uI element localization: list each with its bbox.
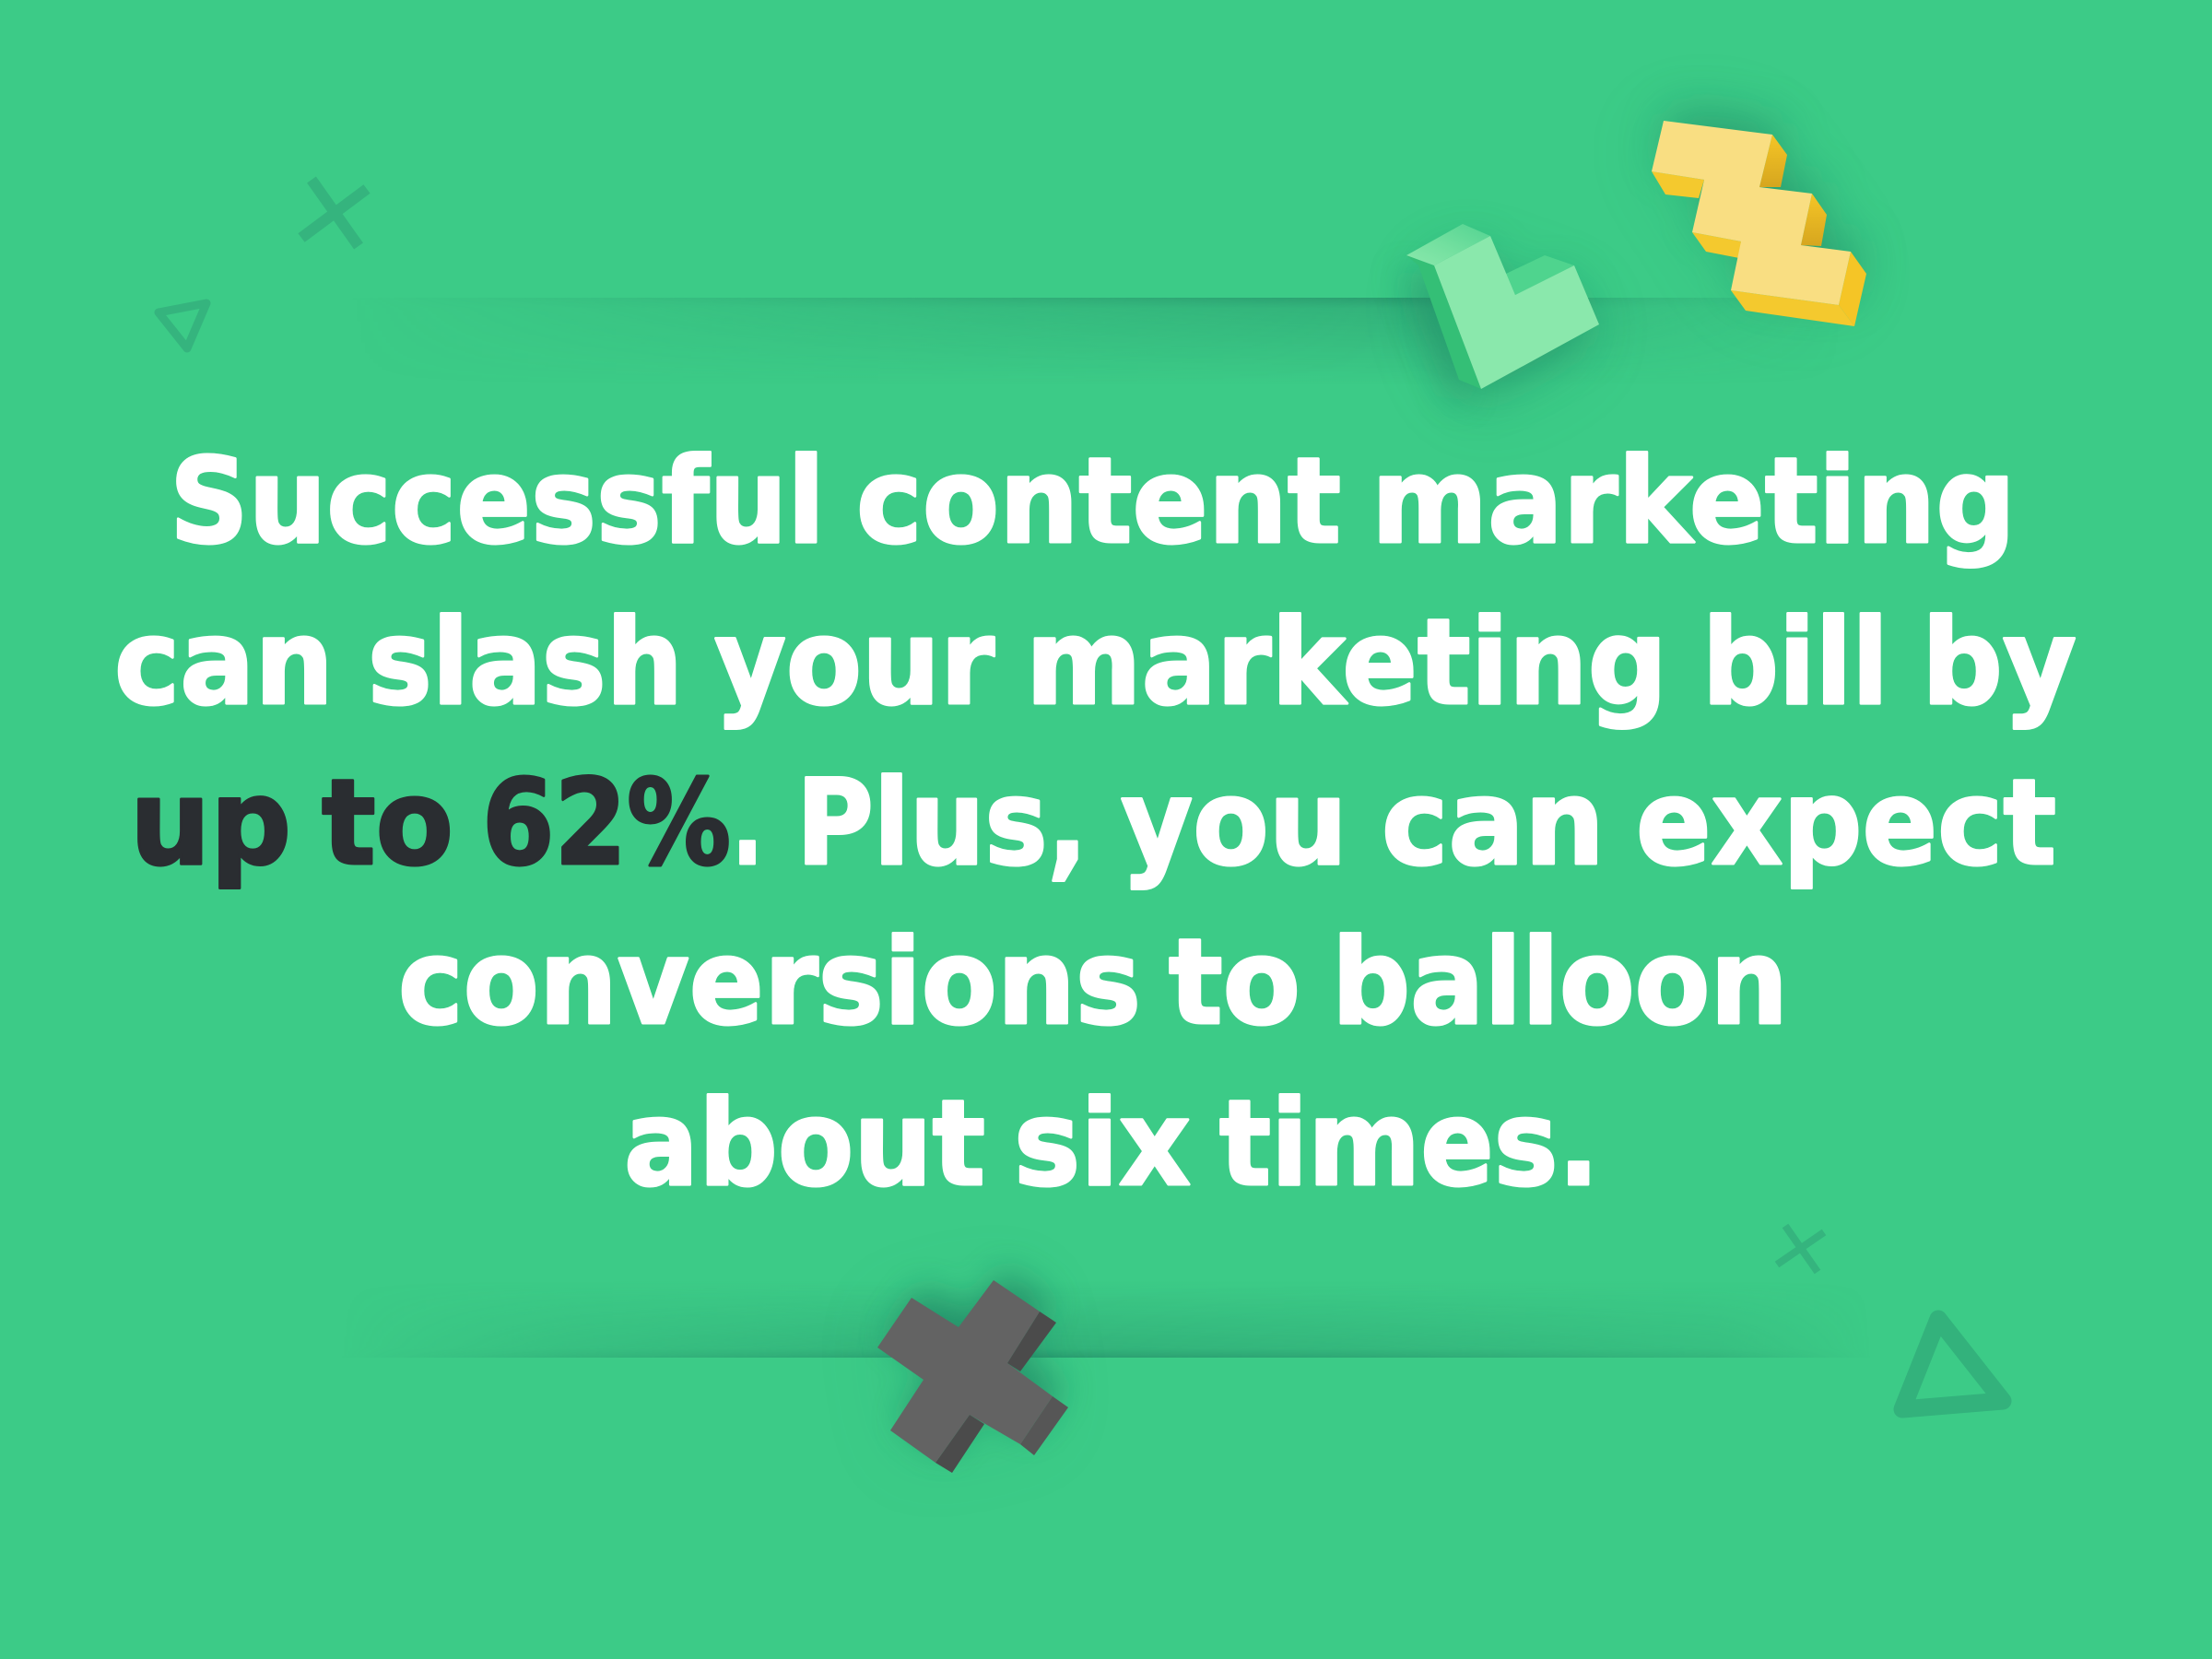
line 3: can [1382,755,1605,892]
line 2 [114,594,2077,732]
line 2: by [1922,594,2077,732]
line 2: slash [368,594,683,732]
line 3: up [130,755,291,892]
icon: small x bottom right [1777,1226,1824,1272]
line 2: bill [1702,594,1888,732]
line 5 [624,1076,1599,1213]
line 1: marketing [1371,433,2016,571]
line 2: marketing [1026,594,1667,732]
line 3: Plus, [796,755,1088,892]
line 3 [130,755,2056,892]
line 2: can [114,594,334,732]
line 4: to [1169,914,1300,1052]
line 1 [170,433,2016,571]
line 1: content [856,433,1341,571]
bottom divider shadow [428,1301,1813,1358]
line 3: you [1121,755,1347,892]
line 5: six [1014,1076,1191,1213]
icon: triangle bottom right [1902,1319,2003,1409]
line 3: . [732,755,763,892]
line 4 [398,914,1788,1052]
line 4: balloon [1332,914,1788,1052]
line 4: conversions [398,914,1141,1052]
headline [114,433,2077,1213]
line 3: expect [1636,755,2056,892]
icon: small x top left [301,180,367,246]
line 5: times. [1219,1076,1599,1213]
line 2: your [714,594,994,732]
icon: yellow 3D zigzag block [1652,112,1866,326]
line 5: about [624,1076,985,1213]
line 3: 62% [482,755,731,892]
icon: grey 3D cross [877,1269,1068,1473]
line 1: Successful [170,433,825,571]
top divider shadow [533,298,1737,363]
line 3: to [322,755,453,892]
icon: small triangle top left [159,303,206,348]
icon: green 3D L block [1394,224,1599,407]
